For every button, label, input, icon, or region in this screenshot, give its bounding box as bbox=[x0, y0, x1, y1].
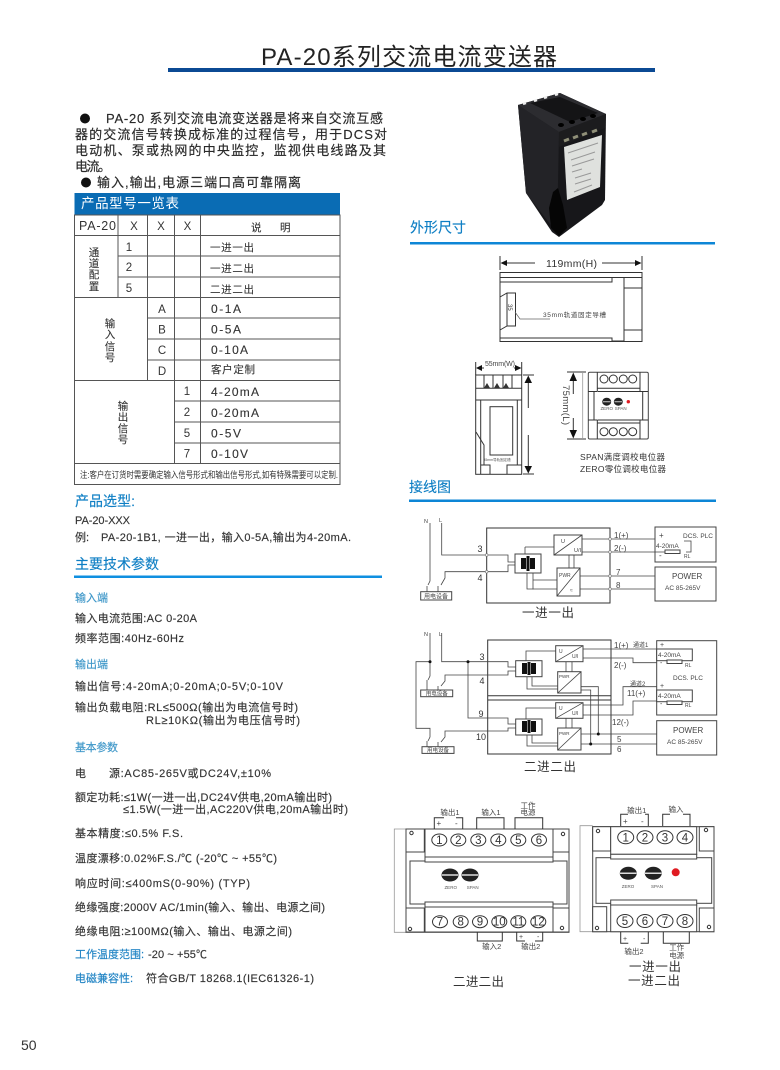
table group: channel configuration: 1 bbox=[126, 242, 132, 254]
parameters: basic parameters: 额定功耗:≤1W(一进一出,DC24V供电,20mA输出时) bbox=[75, 790, 332, 804]
wiring diagram: two in two out: 3 bbox=[479, 652, 485, 662]
table group: output signal: 信 bbox=[118, 423, 128, 435]
parameters: basic parameters: 符合GB/T 18268.1(IEC61326-1) bbox=[146, 971, 314, 985]
terminal diagram: one in one out and one in two out: 输入 bbox=[668, 804, 684, 814]
table group: output signal: 4-20mA bbox=[211, 385, 259, 399]
parameters: basic parameters: -20 ~ +55℃ bbox=[148, 949, 207, 961]
wiring diagram: two in two out: 用电设备 bbox=[426, 690, 448, 698]
table column headings: 说 bbox=[251, 221, 262, 234]
terminal diagram: two in two out: 10 bbox=[493, 917, 506, 929]
table group: output signal: 0-20mA bbox=[211, 406, 259, 420]
terminal diagram: one in one out and one in two out: 一进二出 bbox=[628, 974, 680, 988]
wiring diagram: one in one out: 7 bbox=[616, 568, 621, 577]
terminal diagram: one in one out and one in two out: + bbox=[623, 936, 627, 943]
section: product selection bbox=[75, 493, 351, 544]
parameters: basic parameters: 温度漂移:0.02%F.S./℃ (-20℃ ~ +55℃) bbox=[75, 851, 277, 865]
terminal diagram: two in two out: ZERO bbox=[444, 885, 457, 890]
parameters: basic parameters: 响应时间:≤400mS(0-90%) (TYP) bbox=[75, 876, 250, 890]
terminal diagram: two in two out: SPAN bbox=[467, 885, 479, 890]
terminal diagram: one in one out and one in two out: ZERO bbox=[622, 884, 635, 889]
wiring diagram: two in two out: POWER bbox=[673, 726, 703, 735]
table group: output signal: 7 bbox=[184, 448, 190, 460]
wiring diagram: one in one out: AC 85-265V bbox=[665, 585, 701, 592]
parameters: input terminal bbox=[75, 590, 198, 645]
terminal diagram: two in two out: - bbox=[537, 934, 540, 941]
section heading: outline dimensions: 外形尺寸 bbox=[410, 220, 466, 236]
terminal diagram: one in one out and one in two out: 7 bbox=[662, 916, 668, 928]
table group: input signal: 0-1A bbox=[211, 302, 241, 316]
terminal diagram: one in one out and one in two out: - bbox=[641, 817, 644, 826]
wiring diagram: two in two out: DCS. PLC bbox=[673, 675, 703, 682]
table group: channel configuration: 通 bbox=[89, 247, 100, 259]
table group: channel configuration: 置 bbox=[89, 281, 99, 293]
parameters: output terminal: 输出端 bbox=[75, 657, 108, 671]
parameters: output terminal: 输出信号:4-20mA;0-20mA;0-5V;0-10V bbox=[75, 679, 284, 693]
terminal diagram: two in two out: 输出2 bbox=[521, 941, 540, 951]
table group: input signal: B bbox=[158, 324, 166, 336]
terminal diagram: one in one out and one in two out: 5 bbox=[622, 916, 628, 928]
table group: input signal: 输 bbox=[105, 317, 116, 330]
parameters: basic parameters: 基本参数 bbox=[75, 740, 118, 754]
drawing: front view 55mm width: 35mm导轨固定槽 bbox=[483, 457, 511, 462]
table group: input signal: 0-10A bbox=[211, 343, 248, 357]
wiring diagram: one in one out: 用电设备 bbox=[424, 592, 448, 600]
table column headings bbox=[79, 219, 290, 234]
wiring diagram: one in one out: - bbox=[659, 551, 662, 560]
parameters: basic parameters: 绝缘电阻:≥100MΩ(输入、输出、电源之间) bbox=[75, 924, 292, 938]
table group: output signal: 5 bbox=[184, 428, 190, 440]
title: PA-20系列交流电流变送器 bbox=[261, 44, 557, 71]
table group: channel configuration: 5 bbox=[126, 283, 132, 295]
terminal diagram: two in two out: 电源 bbox=[520, 807, 536, 817]
table grid bbox=[74, 215, 340, 484]
terminal diagram: two in two out: + bbox=[436, 819, 442, 828]
title bbox=[168, 44, 655, 72]
terminal diagram: one in one out and one in two out: 1 bbox=[622, 832, 629, 844]
table group: output signal: 0-5V bbox=[211, 426, 241, 440]
drawing: front view 55mm width bbox=[476, 361, 534, 474]
parameters: input terminal: 输入端 bbox=[75, 590, 108, 604]
parameters: input terminal: 频率范围:40Hz-60Hz bbox=[75, 631, 184, 645]
table column headings: X bbox=[157, 221, 165, 233]
parameters: output terminal: RL≥10KΩ(输出为电压信号时) bbox=[146, 713, 300, 727]
table group: input signal: 客户定制 bbox=[211, 363, 255, 376]
text block: product introduction: 输入,输出,电源三端口高可靠隔离 bbox=[97, 175, 301, 190]
text block: product introduction: 电动机、泵或热网的中央监控，监视供电线路及其 bbox=[75, 143, 386, 158]
terminal diagram: two in two out: 二进二出 bbox=[453, 975, 504, 989]
wiring diagram: two in two out: RL bbox=[685, 663, 692, 669]
terminal diagram: two in two out bbox=[394, 800, 569, 989]
wiring diagram: one in one out: L bbox=[439, 518, 442, 524]
terminal diagram: one in one out and one in two out: 2 bbox=[642, 832, 648, 844]
wiring diagram: two in two out: 5 bbox=[617, 735, 622, 744]
terminal diagram: two in two out: 输出1 bbox=[440, 807, 460, 817]
wiring diagram: two in two out: - bbox=[660, 701, 663, 708]
wiring diagram: two in two out: - bbox=[660, 660, 663, 667]
section: product selection: 产品选型: bbox=[75, 493, 135, 509]
wiring diagram: one in one out: U bbox=[561, 539, 565, 545]
table group: channel configuration bbox=[89, 241, 254, 296]
table group: channel configuration: 道 bbox=[89, 257, 100, 270]
table: product model list bbox=[74, 193, 340, 484]
table group: output signal: 2 bbox=[184, 407, 190, 419]
terminal diagram: one in one out and one in two out: 6 bbox=[642, 916, 648, 928]
table column headings: X bbox=[184, 221, 192, 233]
wiring diagram: one in one out: ≈ bbox=[570, 588, 573, 594]
wiring diagram: two in two out: 4-20mA bbox=[658, 652, 681, 659]
terminal diagram: two in two out: 1 bbox=[436, 835, 443, 847]
terminal diagram: one in one out and one in two out: 8 bbox=[682, 916, 688, 928]
wiring diagram: two in two out: + bbox=[660, 683, 664, 690]
section: product selection: 例: bbox=[75, 530, 89, 544]
wiring diagram: two in two out: 用电设备 bbox=[427, 746, 449, 754]
wiring diagram: two in two out: PWR bbox=[559, 674, 570, 679]
wiring diagram: two in two out: U/I bbox=[572, 654, 578, 660]
table group: input signal: C bbox=[158, 345, 166, 357]
terminal diagram: two in two out: 11 bbox=[512, 917, 524, 929]
text block: product introduction: 电流。 bbox=[75, 159, 111, 174]
wiring diagram: two in two out: 通道2 bbox=[630, 680, 646, 688]
table footnote: 注:客户在订货时需要确定输入信号形式和输出信号形式,如有特殊需要可以定制. bbox=[80, 469, 338, 480]
wiring diagram: one in one out: 4 bbox=[477, 573, 483, 583]
parameters: basic parameters: 源:AC85-265V或DC24V,±10% bbox=[109, 766, 271, 780]
drawing: top view 75mm length: SPAN bbox=[615, 406, 627, 411]
table group: output signal: 号 bbox=[118, 434, 128, 446]
terminal diagram: one in one out and one in two out: - bbox=[643, 936, 646, 943]
terminal diagram: two in two out: 输入2 bbox=[482, 941, 501, 951]
terminal diagram: one in one out and one in two out bbox=[580, 804, 714, 988]
terminal diagram: two in two out: 7 bbox=[437, 917, 443, 929]
wiring diagram: two in two out: RL bbox=[685, 703, 692, 709]
parameters: input terminal: 输入电流范围:AC 0-20A bbox=[75, 611, 198, 625]
text block: product introduction: PA-20 系列交流电流变送器是将来自交流互感 bbox=[106, 111, 383, 126]
section: product selection: PA-20-1B1, 一进一出，输入0-5A,输出为4-20mA. bbox=[101, 530, 351, 544]
wiring diagram: two in two out: 4-20mA bbox=[658, 693, 681, 700]
drawing: side dimension 119mm: 35mm轨道固定导槽 bbox=[543, 310, 606, 319]
wiring diagram: two in two out: N bbox=[424, 632, 428, 638]
parameters: output terminal: 输出负载电阻:RL≤500Ω(输出为电流信号时) bbox=[75, 700, 298, 714]
terminal diagram: one in one out and one in two out: 3 bbox=[662, 832, 668, 844]
table group: input signal: D bbox=[158, 366, 166, 378]
table group: input signal: 信 bbox=[105, 341, 115, 353]
photo: transmitter device bbox=[518, 93, 606, 237]
text block: product introduction bbox=[75, 111, 387, 190]
table group: output signal: 0-10V bbox=[211, 447, 248, 461]
wiring diagram: one in one out: 4-20mA bbox=[656, 543, 679, 550]
table group: channel configuration: 配 bbox=[89, 269, 100, 281]
wiring diagram: two in two out: U bbox=[559, 649, 563, 655]
table group: input signal: A bbox=[158, 304, 166, 316]
wiring diagram: one in one out: N bbox=[424, 519, 428, 525]
table group: input signal: 0-5A bbox=[211, 322, 241, 336]
table group: channel configuration: 一进一出 bbox=[210, 241, 254, 254]
wiring diagram: two in two out: 二进二出 bbox=[524, 760, 576, 774]
terminal diagram: two in two out: 输入1 bbox=[481, 807, 501, 817]
terminal diagram: one in one out and one in two out: 一进一出 bbox=[629, 960, 681, 974]
drawing: top view 75mm length: ZERO bbox=[600, 406, 613, 411]
table header bbox=[74, 193, 340, 215]
terminal diagram: two in two out: + bbox=[519, 934, 523, 941]
wiring diagram: two in two out: 6 bbox=[617, 745, 622, 754]
terminal diagram: one in one out and one in two out: 输出2 bbox=[624, 946, 644, 956]
parameters: basic parameters: 工作温度范围: bbox=[75, 947, 144, 961]
wiring diagram: two in two out: 2(-) bbox=[614, 661, 627, 670]
wiring diagram: two in two out: 4 bbox=[479, 676, 485, 686]
terminal diagram: two in two out: 12 bbox=[532, 917, 545, 929]
wiring diagram: two in two out bbox=[416, 632, 717, 774]
table group: output signal bbox=[118, 385, 259, 461]
table group: input signal: 号 bbox=[105, 352, 115, 364]
table group: channel configuration: 2 bbox=[126, 262, 132, 274]
terminal diagram: two in two out: 5 bbox=[515, 835, 522, 847]
wiring diagram: two in two out: U/I bbox=[572, 711, 578, 717]
wiring diagram: two in two out: 10 bbox=[476, 732, 486, 742]
wiring diagram: one in one out: 一进一出 bbox=[522, 606, 574, 620]
parameters: basic parameters: ≤1.5W(一进一出,AC220V供电,20mA输出时) bbox=[123, 802, 348, 816]
drawing: side dimension 119mm: 35 bbox=[506, 304, 512, 311]
table header: 产品型号一览表 bbox=[81, 196, 180, 211]
table group: output signal: 输 bbox=[118, 400, 129, 412]
table group: input signal: 入 bbox=[105, 329, 116, 341]
parameters: basic parameters: 电 bbox=[75, 767, 86, 780]
table column headings: 明 bbox=[280, 222, 290, 234]
wiring diagram: one in one out: 1(+) bbox=[614, 531, 629, 540]
wiring diagram: two in two out: PWR bbox=[559, 731, 570, 736]
parameters: basic parameters: 电磁兼容性: bbox=[75, 971, 133, 985]
wiring diagram: one in one out: POWER bbox=[672, 572, 702, 581]
terminal diagram: one in one out and one in two out: + bbox=[623, 817, 628, 826]
wiring diagram: two in two out: 12(-) bbox=[612, 718, 629, 727]
wiring diagram: one in one out: 8 bbox=[616, 581, 621, 590]
wiring diagram: one in one out: + bbox=[659, 531, 664, 540]
table group: channel configuration: 一进二出 bbox=[210, 262, 254, 275]
text block: potentiometer notes: ZERO零位调校电位器 bbox=[580, 464, 666, 474]
parameters: basic parameters: 基本精度:≤0.5% F.S. bbox=[75, 826, 183, 840]
text block: product introduction: 器的交流信号转换成标准的过程信号，用于DCS对 bbox=[75, 127, 387, 142]
terminal diagram: two in two out: 9 bbox=[477, 917, 483, 929]
parameters: output terminal bbox=[75, 657, 300, 727]
table column headings: PA-20 bbox=[79, 219, 116, 233]
table group: output signal: 1 bbox=[184, 386, 190, 398]
wiring diagram: one in one out bbox=[421, 518, 716, 620]
terminal diagram: one in one out and one in two out: 4 bbox=[682, 832, 689, 844]
section heading: wiring diagram: 接线图 bbox=[409, 479, 451, 495]
wiring diagram: one in one out: 2(-) bbox=[614, 544, 627, 553]
table group: output signal: 出 bbox=[118, 410, 128, 424]
section: product selection: PA-20-XXX bbox=[75, 515, 131, 527]
terminal diagram: one in one out and one in two out: 输出1 bbox=[627, 805, 646, 815]
drawing: top view 75mm length: 75mm(L) bbox=[560, 385, 571, 425]
parameters: basic parameters: 绝缘强度:2000V AC/1min(输入、输出、电源之间) bbox=[75, 900, 325, 914]
terminal diagram: two in two out: 6 bbox=[536, 835, 542, 847]
table group: channel configuration: 二进二出 bbox=[210, 283, 254, 296]
terminal diagram: two in two out: 工作 bbox=[520, 800, 536, 810]
terminal diagram: two in two out: 8 bbox=[457, 917, 464, 929]
parameters: basic parameters bbox=[75, 740, 348, 985]
page number: 50 bbox=[21, 1037, 37, 1053]
wiring diagram: two in two out: L bbox=[439, 632, 442, 638]
wiring diagram: two in two out: 通道1 bbox=[633, 641, 649, 649]
drawing: top view 75mm length bbox=[560, 372, 648, 439]
terminal diagram: two in two out: 3 bbox=[475, 835, 482, 847]
wiring diagram: two in two out: + bbox=[660, 642, 664, 649]
terminal diagram: one in one out and one in two out: 工作 bbox=[669, 942, 685, 952]
text block: potentiometer notes: SPAN满度调校电位器 bbox=[580, 452, 665, 462]
terminal diagram: one in one out and one in two out: SPAN bbox=[651, 884, 663, 889]
table group: input signal bbox=[105, 302, 255, 378]
drawing: front view 55mm width: 55mm(W) bbox=[485, 361, 515, 368]
table column headings: X bbox=[130, 221, 138, 233]
wiring diagram: two in two out: 1(+) bbox=[614, 641, 629, 650]
wiring diagram: two in two out: 9 bbox=[478, 709, 484, 719]
text block: potentiometer notes bbox=[580, 452, 666, 474]
wiring diagram: two in two out: 11(+) bbox=[627, 689, 646, 698]
wiring diagram: one in one out: DCS. PLC bbox=[683, 533, 713, 540]
wiring diagram: two in two out: U bbox=[559, 706, 563, 712]
terminal diagram: one in one out and one in two out: 电源 bbox=[669, 950, 685, 960]
terminal diagram: two in two out: 4 bbox=[495, 835, 502, 847]
wiring diagram: one in one out: 3 bbox=[477, 544, 483, 554]
drawing: side dimension 119mm: 119mm(H) bbox=[546, 258, 597, 270]
wiring diagram: one in one out: U/I bbox=[574, 548, 582, 554]
terminal diagram: two in two out: 2 bbox=[455, 835, 462, 847]
wiring diagram: one in one out: RL bbox=[684, 554, 691, 560]
wiring diagram: one in one out: PWR bbox=[559, 573, 571, 579]
terminal diagram: two in two out: - bbox=[455, 819, 458, 828]
wiring diagram: two in two out: AC 85-265V bbox=[667, 739, 703, 746]
drawing: side dimension 119mm bbox=[500, 256, 642, 342]
section heading: main technical parameters: 主要技术参数 bbox=[75, 556, 159, 572]
